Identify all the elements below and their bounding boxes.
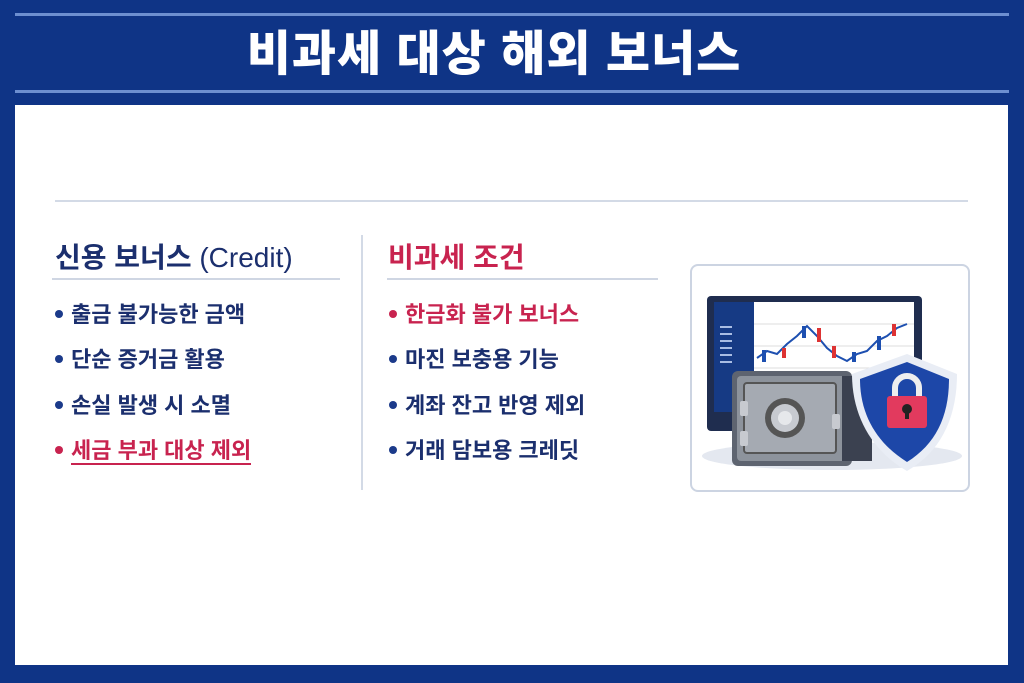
item 2: 단순 증거금 활용	[71, 347, 225, 372]
item 3: 손실 발생 시 소멸	[71, 393, 231, 418]
list: credit bonus items	[55, 302, 251, 465]
heading: credit bonus: 신용 보너스 (Credit)	[55, 242, 293, 273]
heading: tax-free conditions: 비과세 조건	[388, 242, 525, 273]
item 4: 세금 부과 대상 제외	[71, 438, 251, 463]
panel: white content	[15, 105, 1008, 665]
title: 비과세 대상 해외 보너스	[247, 28, 741, 81]
item 1: 한금화 불가 보너스	[405, 302, 579, 327]
item 3: 계좌 잔고 반영 제외	[405, 393, 585, 418]
list: conditions	[389, 302, 585, 463]
item 4: 거래 담보용 크레딧	[405, 438, 579, 463]
item 1: 출금 불가능한 금액	[71, 302, 245, 327]
item 2: 마진 보충용 기능	[405, 347, 559, 372]
illustration: chart, safe, shield	[690, 264, 970, 492]
